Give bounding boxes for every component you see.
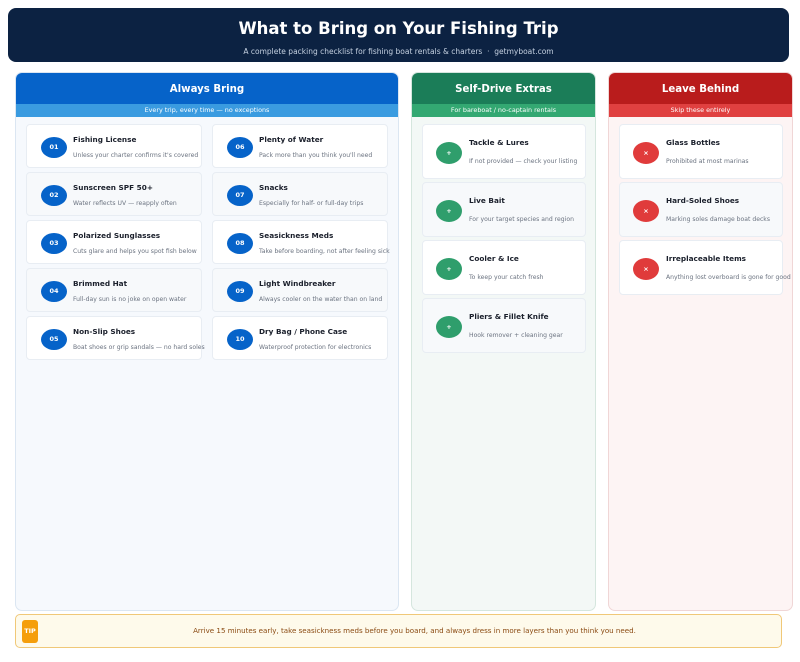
item 02: 02	[49, 191, 59, 199]
item irreplaceable: Anything lost overboard is gone for good	[666, 274, 791, 281]
item 08: Take before boarding, not after feeling sick	[259, 248, 390, 255]
item 10: 10	[235, 335, 245, 343]
item 01: 01	[49, 143, 59, 151]
item 02: Water reflects UV — reapply often	[73, 200, 177, 207]
item bait: For your target species and region	[469, 216, 574, 223]
item bait	[422, 182, 586, 237]
item irreplaceable: ×	[643, 265, 649, 273]
panel: leave behind: Skip these entirely	[671, 106, 730, 114]
item 02	[26, 172, 202, 216]
item 04: 04	[49, 287, 59, 295]
header: What to Bring on Your Fishing Trip	[238, 19, 559, 38]
item 05	[26, 316, 202, 360]
item irreplaceable: Irreplaceable Items	[666, 254, 746, 263]
panel: self-drive extras: Self-Drive Extras	[455, 84, 552, 95]
item 03	[26, 220, 202, 264]
header	[8, 8, 789, 62]
item 09: Light Windbreaker	[259, 279, 335, 288]
icon: tip badge	[22, 620, 38, 643]
panel: leave behind: Leave Behind	[662, 84, 739, 95]
item 06: Pack more than you think you'll need	[259, 152, 372, 159]
item 05: Boat shoes or grip sandals — no hard soles	[73, 344, 205, 351]
header: A complete packing checklist for fishing boat rentals & charters · getmyboat.com	[243, 47, 554, 56]
item tackle: Tackle & Lures	[469, 138, 529, 147]
panel: self-drive extras: For bareboat / no-captain rentals	[451, 106, 556, 114]
item 04: Full-day sun is no joke on open water	[73, 296, 186, 303]
item 03: Cuts glare and helps you spot fish below	[73, 248, 197, 255]
item glass: Prohibited at most marinas	[666, 158, 749, 165]
item 05: Non-Slip Shoes	[73, 327, 135, 336]
item tackle: +	[446, 149, 452, 157]
item 02: Sunscreen SPF 50+	[73, 183, 153, 192]
item 09	[212, 268, 388, 312]
item 01	[26, 124, 202, 168]
item 10: Dry Bag / Phone Case	[259, 327, 347, 336]
item irreplaceable	[619, 240, 783, 295]
item shoes: Hard-Soled Shoes	[666, 196, 739, 205]
item bait: +	[446, 207, 452, 215]
tip bar	[15, 614, 782, 648]
panel: always bring: Every trip, every time — no exceptions	[145, 106, 269, 114]
item cooler: To keep your catch fresh	[469, 274, 544, 281]
item 08: 08	[235, 239, 245, 247]
item 10	[212, 316, 388, 360]
item pliers: +	[446, 323, 452, 331]
item shoes: ×	[643, 207, 649, 215]
item 06	[212, 124, 388, 168]
panel: leave behind	[608, 72, 793, 611]
item 09: Always cooler on the water than on land	[259, 296, 382, 303]
item tackle: If not provided — check your listing	[469, 158, 577, 165]
item 07	[212, 172, 388, 216]
item pliers: Pliers & Fillet Knife	[469, 312, 549, 321]
tip text: Arrive 15 minutes early, take seasickness meds before you board, and always dress in more layers than you think you need.	[193, 626, 636, 635]
item 08: Seasickness Meds	[259, 231, 333, 240]
item 03: Polarized Sunglasses	[73, 231, 160, 240]
panel: always bring	[15, 72, 399, 611]
item pliers	[422, 298, 586, 353]
item glass: ×	[643, 149, 649, 157]
item cooler	[422, 240, 586, 295]
item 01: Fishing License	[73, 135, 136, 144]
item shoes	[619, 182, 783, 237]
item 10: Waterproof protection for electronics	[259, 344, 371, 351]
item 06: Plenty of Water	[259, 135, 323, 144]
item 08	[212, 220, 388, 264]
item 05: 05	[49, 335, 59, 343]
item tackle	[422, 124, 586, 179]
item shoes: Marking soles damage boat decks	[666, 216, 770, 223]
panel: self-drive extras	[411, 72, 596, 611]
item bait: Live Bait	[469, 196, 505, 205]
item cooler: Cooler & Ice	[469, 254, 519, 263]
item 04	[26, 268, 202, 312]
item 04: Brimmed Hat	[73, 279, 127, 288]
panel: always bring: Always Bring	[170, 84, 244, 95]
item 07: Especially for half- or full-day trips	[259, 200, 363, 207]
item 01: Unless your charter confirms it's covered	[73, 152, 198, 159]
item 07: Snacks	[259, 183, 288, 192]
icon: tip badge: TIP	[24, 627, 36, 635]
item 07: 07	[235, 191, 245, 199]
item 03: 03	[49, 239, 59, 247]
item pliers: Hook remover + cleaning gear	[469, 332, 563, 339]
item glass: Glass Bottles	[666, 138, 720, 147]
item 06: 06	[235, 143, 245, 151]
item glass	[619, 124, 783, 179]
item cooler: +	[446, 265, 452, 273]
item 09: 09	[235, 287, 245, 295]
